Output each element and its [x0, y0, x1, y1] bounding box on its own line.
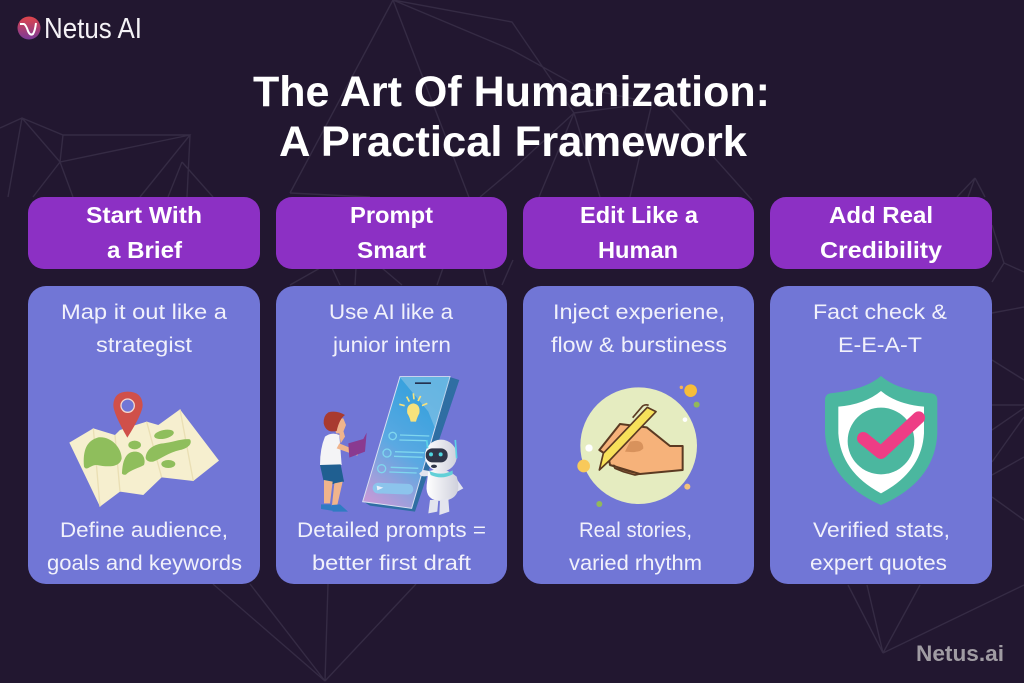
- icon: shield with check: [825, 376, 937, 505]
- text: verified stats: Verified stats,: [813, 519, 950, 542]
- icon: hand writing with pen: [577, 384, 700, 507]
- text: detailed prompts: better first draft: [312, 552, 471, 575]
- header: add real credibility: Add Real: [829, 202, 933, 228]
- child: [333, 418, 346, 433]
- text: map it out: Map it out like a: [61, 301, 227, 324]
- header: prompt smart: Prompt: [350, 202, 433, 228]
- text: define audience: goals and keywords: [47, 552, 242, 575]
- title: [253, 68, 770, 166]
- panel: prompt smart: [276, 197, 507, 584]
- text: use ai: Use AI like a: [329, 301, 453, 324]
- header: edit like a human: [523, 197, 754, 269]
- text: detailed prompts: [297, 519, 486, 575]
- text: map it out: [61, 301, 227, 357]
- text: real stories: [569, 519, 702, 575]
- text: fact check: [813, 301, 947, 357]
- text: real stories: Real stories,: [579, 519, 692, 542]
- text: define audience: Define audience,: [60, 519, 228, 542]
- icon: folded map with pin: [69, 392, 219, 507]
- card: edit like a human: [523, 286, 754, 584]
- header: start with a brief: Start With: [86, 202, 202, 228]
- text: verified stats: expert quotes: [810, 552, 947, 575]
- header: prompt smart: Smart: [357, 237, 426, 263]
- text: inject experience: Inject experiene,: [553, 301, 725, 324]
- title: The Art Of Humanization:: [253, 68, 770, 116]
- logo: Netus AI: Netus AI: [44, 13, 142, 45]
- panel: add real credibility: [770, 197, 992, 584]
- text: verified stats: [810, 519, 950, 575]
- text: map it out: strategist: [96, 334, 192, 357]
- panel: start with a brief: [28, 197, 260, 584]
- text: fact check: E-E-A-T: [838, 334, 922, 357]
- text: define audience: [47, 519, 242, 575]
- footer brand: Netus.ai: Netus.ai: [916, 641, 1004, 666]
- header: add real credibility: Credibility: [820, 237, 942, 263]
- text: use ai: [329, 301, 453, 357]
- header: prompt smart: [276, 197, 507, 269]
- card: prompt smart: [276, 286, 507, 584]
- text: inject experience: [551, 301, 727, 357]
- panel: edit like a human: [523, 197, 754, 584]
- text: real stories: varied rhythm: [569, 552, 702, 575]
- card: start with a brief: [28, 286, 260, 584]
- header: add real credibility: [770, 197, 992, 269]
- icon: phone, child and robot: [320, 376, 463, 515]
- header: start with a brief: a Brief: [107, 237, 182, 263]
- robot: [419, 470, 463, 492]
- title: A Practical Framework: [279, 118, 747, 166]
- text: fact check: Fact check &: [813, 301, 947, 324]
- card: add real credibility: [770, 286, 992, 584]
- header: start with a brief: [28, 197, 260, 269]
- text: use ai: junior intern: [332, 334, 451, 357]
- header: edit like a human: Human: [598, 237, 678, 263]
- text: inject experience: flow & burstiness: [551, 334, 727, 357]
- header: edit like a human: Edit Like a: [580, 202, 698, 228]
- text: detailed prompts: Detailed prompts =: [297, 519, 486, 542]
